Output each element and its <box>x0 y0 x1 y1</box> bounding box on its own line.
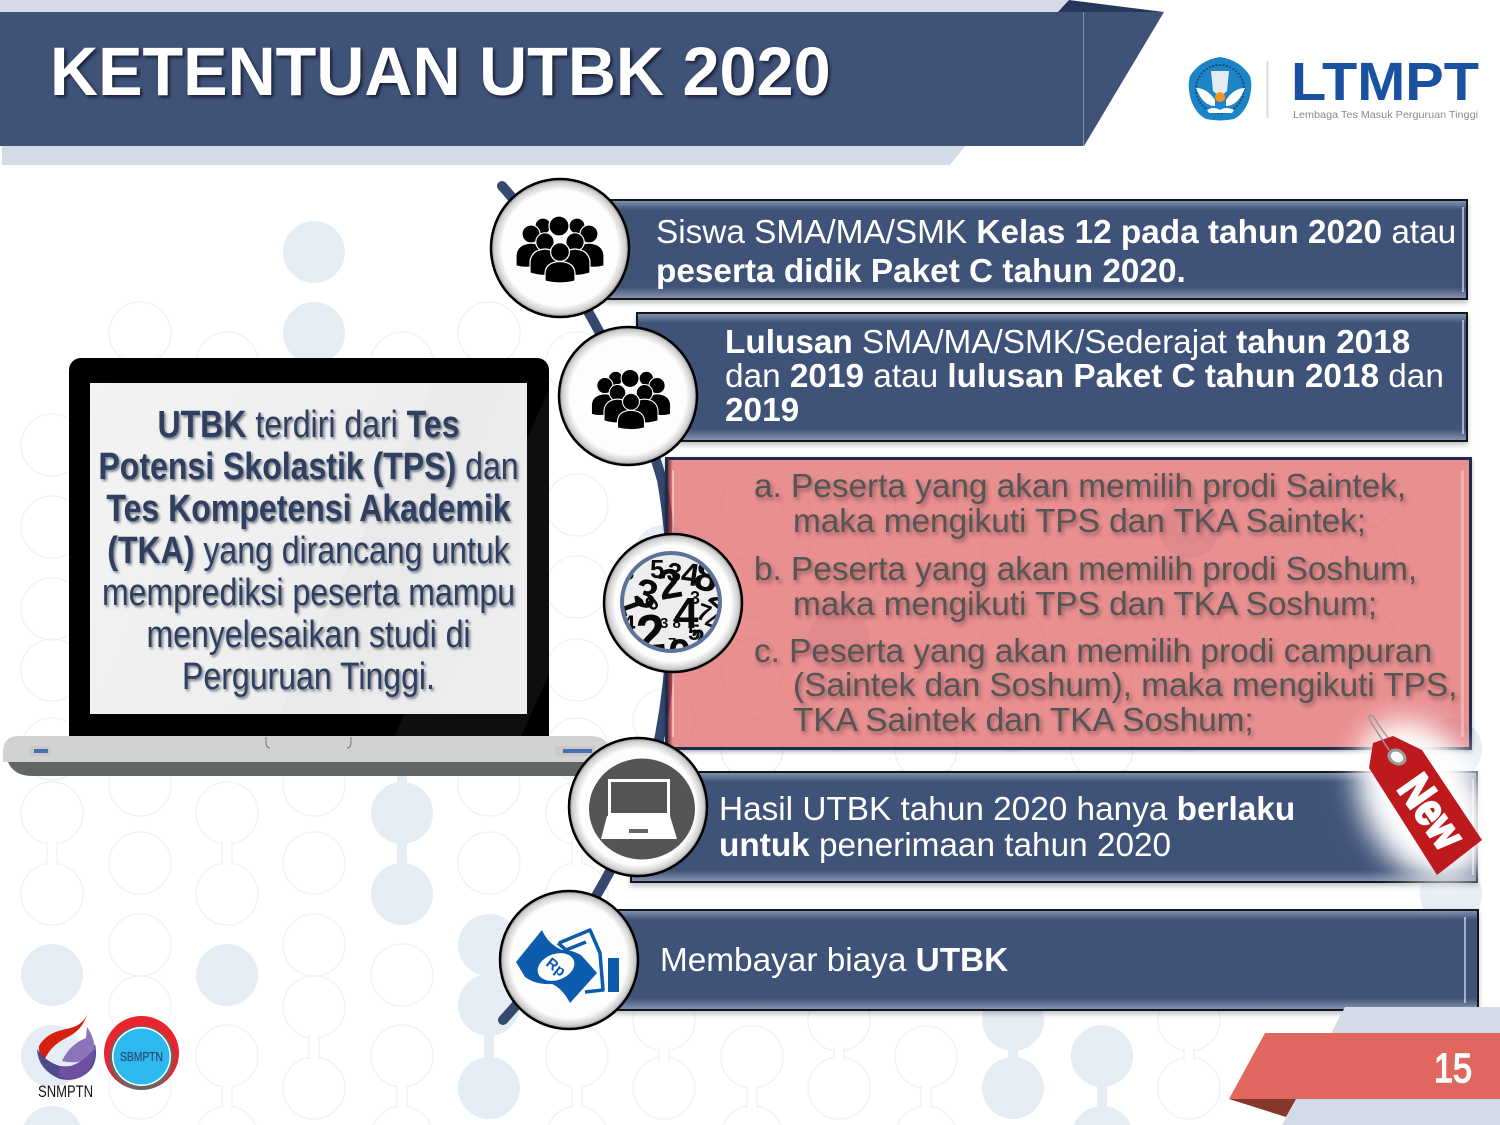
logo: SNMPTN: SNMPTN <box>38 1082 93 1101</box>
laptop illustration <box>3 358 608 776</box>
panel: fee: Membayar biaya UTBK <box>660 942 1008 979</box>
laptop screen text block: UTBK terdiri dari Tes <box>157 404 460 446</box>
circle: numbers icon: 0 <box>641 592 664 616</box>
panel: fee <box>610 909 1479 1011</box>
circle: laptop icon <box>569 738 707 876</box>
circle: payment icon: Rp <box>543 955 569 980</box>
circle: numbers icon: 2 <box>654 559 686 609</box>
circle: group icon two <box>559 327 697 465</box>
panel: test choice rules: a. Peserta yang akan memilih prodi Saintek, <box>754 468 1406 505</box>
circle: numbers icon: 5 <box>688 620 700 645</box>
panel: test choice rules: maka mengikuti TPS dan TKA Saintek; <box>793 503 1366 540</box>
panel: graduates 2018 and 2019: Lulusan SMA/MA/SMK/Sederajat tahun 2018 <box>725 324 1410 361</box>
panel: graduates 2018 and 2019: dan 2019 atau lulusan Paket C tahun 2018 dan <box>725 358 1444 395</box>
circle: numbers icon: 2 <box>703 580 736 616</box>
panel: test choice rules: c. Peserta yang akan memilih prodi campuran <box>754 633 1432 670</box>
laptop screen text block <box>90 383 527 714</box>
timeline circles and icons <box>490 178 744 1030</box>
circle: numbers icon: 4 <box>622 611 636 638</box>
title: KETENTUAN UTBK 2020 <box>50 33 831 110</box>
panel: test choice rules: TKA Saintek dan TKA Soshum; <box>793 702 1254 739</box>
laptop screen text block: Tes Kompetensi Akademik <box>106 488 511 530</box>
laptop screen text block: Potensi Skolastik (TPS) dan <box>98 446 519 488</box>
panel: test choice rules <box>665 457 1472 750</box>
circle: numbers icon: 3 <box>690 588 700 608</box>
circle: payment icon <box>500 891 638 1029</box>
circle: numbers icon <box>604 534 742 677</box>
panel: eligibility grade 12: peserta didik Paket C tahun 2020. <box>656 253 1186 290</box>
page number ribbon: 15 <box>1434 1045 1472 1091</box>
circle: numbers icon: 4 <box>701 605 725 639</box>
circle: numbers icon: 4 <box>674 589 699 638</box>
panel: eligibility grade 12 <box>600 199 1468 300</box>
circle: numbers icon: 3 <box>665 556 684 588</box>
laptop screen text block: Perguruan Tinggi. <box>182 656 435 698</box>
logo: LTMPT: Lembaga Tes Masuk Perguruan Tinggi <box>1293 109 1478 121</box>
circle: numbers icon: 1 <box>610 590 653 621</box>
icon: Tut Wuri Handayani emblem <box>1189 57 1251 120</box>
panel: test choice rules: maka mengikuti TPS dan TKA Soshum; <box>793 586 1377 623</box>
laptop screen text block: memprediksi peserta mampu <box>102 572 515 614</box>
panel: eligibility grade 12: Siswa SMA/MA/SMK Kelas 12 pada tahun 2020 atau <box>656 214 1456 251</box>
laptop base <box>3 736 608 776</box>
circle: numbers icon: 2 <box>634 604 668 664</box>
circle: numbers icon: 3 <box>630 570 663 618</box>
panel: graduates 2018 and 2019: 2019 <box>725 392 799 429</box>
circle: numbers icon: 2 <box>689 624 711 654</box>
logo: SBMPTN: SBMPTN <box>120 1049 163 1064</box>
logo: LTMPT: LTMPT <box>1291 52 1479 112</box>
panel: graduates 2018 and 2019 <box>636 312 1468 442</box>
circle: numbers icon: 6 <box>618 562 638 586</box>
panel: result validity: Hasil UTBK tahun 2020 hanya berlaku <box>719 791 1295 828</box>
panel: result validity: untuk penerimaan tahun 2020 <box>719 827 1171 864</box>
circle: numbers icon: 5 <box>650 554 664 584</box>
circle: numbers icon: 4 <box>679 555 702 593</box>
laptop screen text block: (TKA) yang dirancang untuk <box>107 530 510 572</box>
laptop screen text block: menyelesaikan studi di <box>146 614 471 656</box>
new tag: New <box>1388 765 1476 858</box>
circle: numbers icon: 7 <box>693 598 715 628</box>
circle: numbers icon: 8 <box>690 551 723 602</box>
laptop screen frame <box>69 358 549 738</box>
circle: numbers icon: 3 8 <box>660 615 681 632</box>
panel: test choice rules: (Saintek dan Soshum), maka mengikuti TPS, <box>793 667 1457 704</box>
circle: group icon one <box>491 179 629 317</box>
logo: LTMPT <box>1188 52 1479 121</box>
circle: numbers icon: 0 <box>668 630 691 677</box>
header banner <box>0 0 1164 165</box>
circle: numbers icon: 7 <box>668 635 676 652</box>
panel: test choice rules: b. Peserta yang akan memilih prodi Soshum, <box>754 551 1417 588</box>
panel: result validity <box>630 771 1478 883</box>
